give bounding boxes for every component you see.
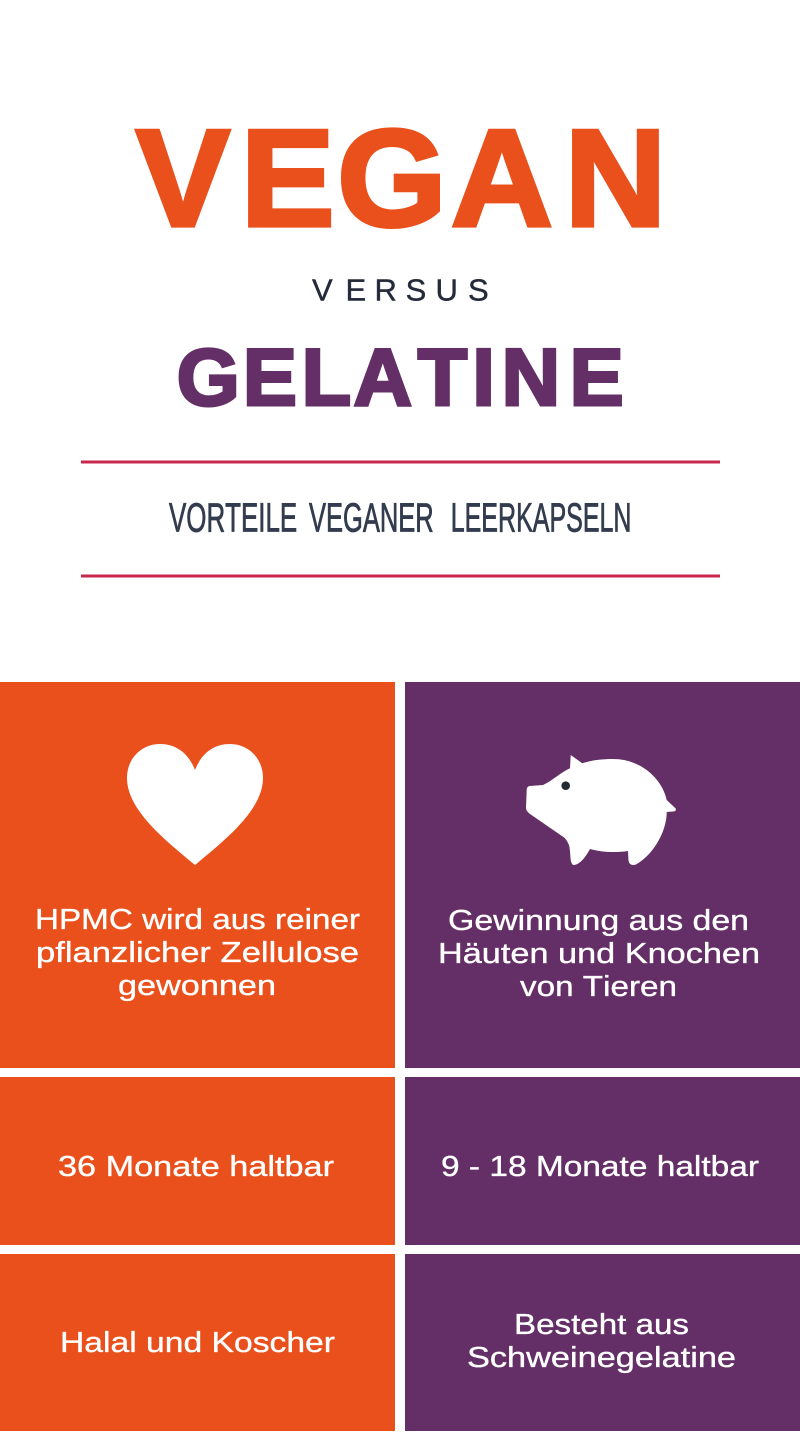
title: GELATINE: GELATINE (177, 333, 624, 423)
panel: gelatine shelf life (405, 1077, 800, 1245)
text: gelatine description: von Tieren (520, 971, 677, 1003)
panel: HPMC plant origin (0, 682, 395, 1068)
panel: halal and kosher (0, 1254, 395, 1431)
text: HPMC description (35, 904, 360, 1002)
panel: pork gelatine: Schweinegelatine (467, 1342, 736, 1374)
panel: pork gelatine (405, 1254, 800, 1431)
subtitle (169, 496, 632, 541)
icon: pig (526, 755, 676, 865)
panel: gelatine shelf life: 9 - 18 Monate haltbar (441, 1151, 759, 1183)
heading: VERSUS: VERSUS (312, 273, 489, 308)
icon: heart (127, 744, 263, 865)
panel: vegan shelf life (0, 1077, 395, 1245)
text: gelatine description: Gewinnung aus den (448, 905, 749, 937)
subtitle: VEGANER (309, 496, 434, 541)
text: gelatine description (438, 905, 760, 1003)
text: gelatine description: Häuten und Knochen (438, 938, 760, 970)
text: HPMC description: gewonnen (118, 970, 276, 1002)
panel: vegan shelf life: 36 Monate haltbar (58, 1151, 334, 1183)
subtitle: VORTEILE (169, 496, 297, 541)
subtitle: LEERKAPSELN (451, 497, 632, 541)
panel: gelatine animal origin (405, 682, 800, 1068)
text: HPMC description: HPMC wird aus reiner (35, 904, 360, 936)
title: VEGAN: VEGAN (136, 101, 666, 255)
panel: pork gelatine: Besteht aus (514, 1309, 689, 1341)
text: HPMC description: pflanzlicher Zellulose (36, 937, 359, 969)
panel: halal and kosher: Halal und Koscher (60, 1327, 335, 1359)
